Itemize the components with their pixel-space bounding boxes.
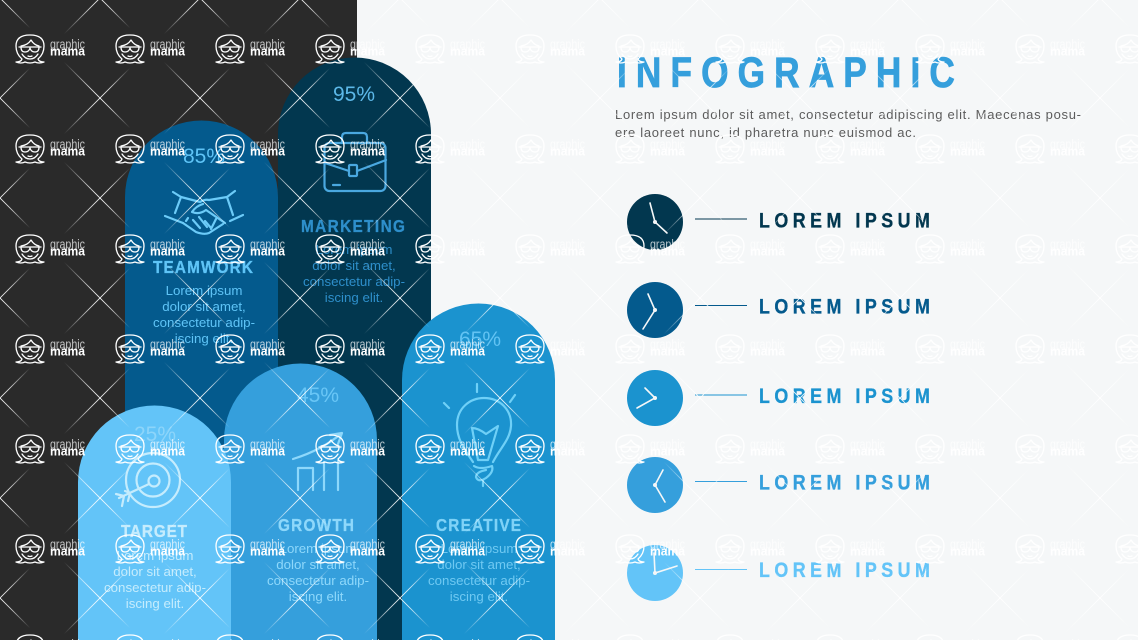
label: LOREM IPSUM (759, 559, 930, 582)
target description (104, 548, 206, 611)
connector line (695, 305, 747, 306)
marketing description (303, 242, 405, 305)
icon: clock light blue (627, 457, 683, 513)
connector line (695, 394, 747, 396)
icon: target with arrow (116, 453, 180, 507)
panel: marketing (278, 58, 431, 640)
panel: target (78, 406, 231, 640)
label: LOREM IPSUM (759, 385, 930, 408)
icon: clock sky blue (627, 545, 683, 601)
target description: consectetur adip- (104, 580, 206, 595)
intro text (615, 107, 1081, 140)
panel: growth (224, 364, 377, 640)
teamwork description (153, 283, 255, 346)
connector line (695, 569, 747, 570)
marketing description: Lorem ipsum (316, 242, 392, 257)
legend item 1 (627, 194, 930, 250)
growth heading: GROWTH (278, 515, 354, 535)
creative heading: CREATIVE (436, 515, 521, 535)
icon: clock blue (627, 282, 683, 338)
target description: dolor sit amet, (113, 564, 197, 579)
growth description: consectetur adip- (267, 573, 369, 588)
legend item 2 (627, 282, 930, 338)
creative description: consectetur adip- (428, 573, 530, 588)
marketing description: dolor sit amet, (312, 258, 396, 273)
teamwork description: dolor sit amet, (162, 299, 246, 314)
teamwork description: iscing elit. (175, 331, 233, 346)
icon: growth chart (293, 433, 342, 490)
legend item 5 (627, 545, 930, 601)
marketing percentage: 95% (333, 83, 375, 106)
background: left dark panel (0, 0, 357, 640)
creative description: dolor sit amet, (437, 557, 521, 572)
label: LOREM IPSUM (759, 209, 930, 233)
icon: handshake (165, 191, 243, 234)
growth description: dolor sit amet, (276, 557, 360, 572)
creative description: Lorem ipsum (441, 541, 517, 556)
title: INFOGRAPHIC (617, 49, 955, 97)
growth description (267, 541, 369, 604)
label: LOREM IPSUM (759, 471, 930, 495)
teamwork description: Lorem ipsum (166, 283, 242, 298)
creative percentage: 65% (459, 328, 501, 351)
marketing heading: MARKETING (301, 216, 405, 236)
target heading: TARGET (121, 521, 188, 541)
growth description: Lorem ipsum (280, 541, 356, 556)
connector line (695, 218, 747, 220)
creative description: iscing elit. (450, 589, 508, 604)
legend item 4 (627, 457, 930, 513)
panel: creative (402, 304, 555, 640)
growth percentage: 45% (297, 384, 339, 407)
creative description (428, 541, 530, 604)
target percentage: 25% (134, 423, 176, 446)
target description: Lorem ipsum (117, 548, 193, 563)
label: LOREM IPSUM (759, 295, 930, 319)
connector line (695, 481, 747, 482)
icon: light bulb (444, 384, 515, 486)
marketing description: iscing elit. (325, 290, 383, 305)
intro text: Lorem ipsum dolor sit amet, consectetur adipiscing elit. Maecenas posu- (615, 107, 1081, 122)
teamwork percentage: 85% (183, 145, 225, 168)
teamwork description: consectetur adip- (153, 315, 255, 330)
growth description: iscing elit. (289, 589, 347, 604)
icon: briefcase (324, 133, 386, 191)
legend item 3 (627, 370, 930, 426)
intro text: ere laoreet nunc, id pharetra nunc euismod ac. (615, 125, 916, 140)
icon: clock dark navy (627, 194, 683, 250)
teamwork heading: TEAMWORK (153, 257, 253, 277)
target description: iscing elit. (126, 596, 184, 611)
panel: teamwork (125, 120, 278, 640)
icon: clock mid blue (627, 370, 683, 426)
marketing description: consectetur adip- (303, 274, 405, 289)
